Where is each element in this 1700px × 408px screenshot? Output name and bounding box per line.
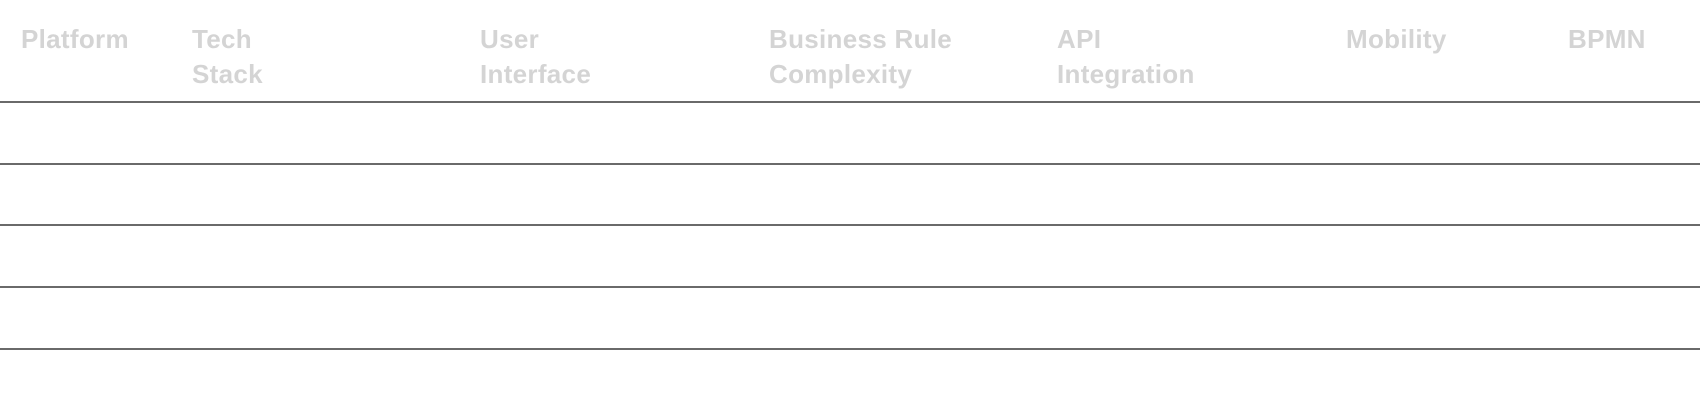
header: API Integration: Integration <box>1057 59 1195 89</box>
header: Platform: Platform <box>21 24 129 54</box>
header: Tech Stack: Tech <box>192 24 252 54</box>
header: Business Rule Complexity <box>769 24 952 89</box>
header: API Integration <box>1057 24 1195 89</box>
header: Tech Stack: Stack <box>192 59 263 89</box>
header: User Interface <box>480 24 591 89</box>
header: Tech Stack <box>192 24 263 89</box>
header: User Interface: User <box>480 24 539 54</box>
header: BPMN: BPMN <box>1568 24 1646 54</box>
header: Business Rule Complexity: Business Rule <box>769 24 952 54</box>
header: API Integration: API <box>1057 24 1101 54</box>
header: Business Rule Complexity: Complexity <box>769 59 912 89</box>
header: Mobility: Mobility <box>1346 24 1447 54</box>
header: User Interface: Interface <box>480 59 591 89</box>
